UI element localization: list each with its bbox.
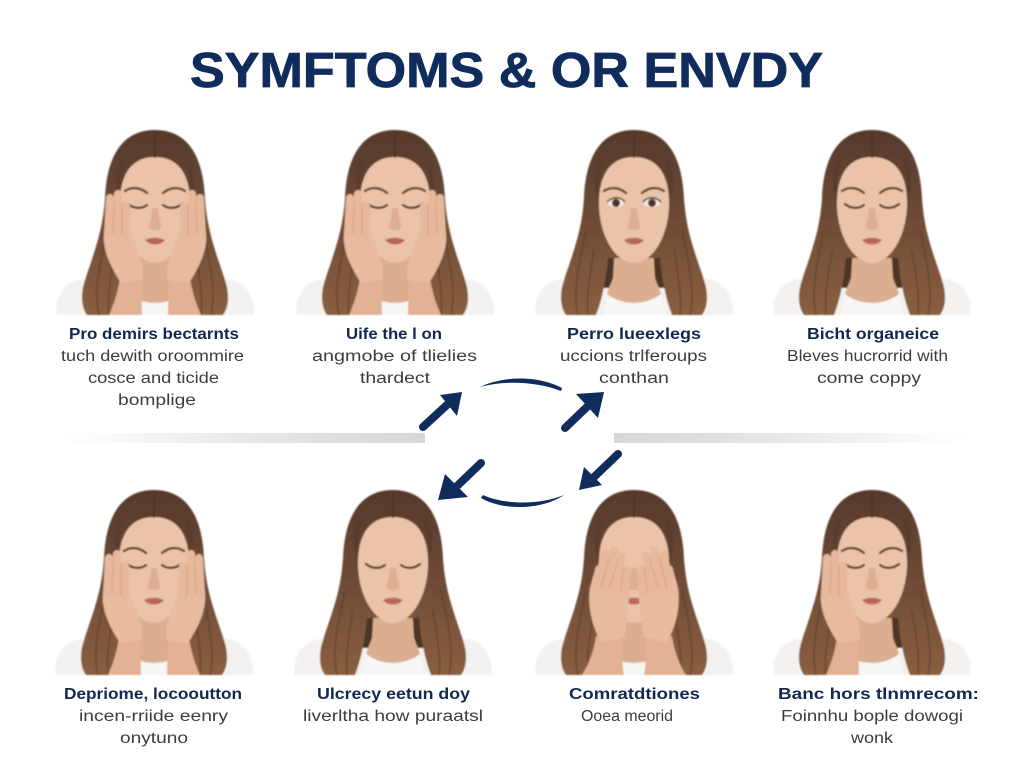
description: symptom 8: wonk (850, 730, 893, 747)
portrait: hands covering eyes (535, 490, 733, 675)
portrait: hands on both cheeks (55, 490, 253, 675)
heading: symptom 1: Pro demirs bectarnts (69, 326, 239, 343)
description: symptom 2: angmobe of tlielies (312, 348, 477, 365)
description: symptom 8: Foinnhu bople dowogi (781, 708, 963, 725)
portrait: one hand on cheek (773, 490, 971, 675)
portrait: eyes closed (294, 490, 492, 675)
arc: bottom (481, 495, 564, 507)
panel: symptom 6 (294, 490, 492, 725)
description: symptom 5 (79, 708, 228, 747)
heading: symptom 3: Perro lueexlegs (567, 326, 701, 343)
description: symptom 5: incen-rriide eenry (79, 708, 228, 725)
panel: symptom 2 (296, 130, 494, 387)
arrow: up right, left (423, 392, 462, 427)
cycle arrows (423, 378, 618, 507)
description: symptom 4: Bleves hucrorrid with (787, 348, 948, 365)
arrow: down left, left (438, 463, 481, 500)
arrow: up right, right (565, 392, 604, 428)
arc: top (480, 378, 562, 391)
description: symptom 7: Ooea meorid (581, 708, 673, 725)
right divider (614, 433, 970, 443)
arrow: down left, right (579, 454, 618, 490)
left divider (55, 433, 425, 443)
panel: symptom 4 (773, 130, 971, 387)
portrait: hands on both cheeks (296, 130, 494, 315)
heading: symptom 5: Depriome, locooutton (64, 686, 242, 703)
description: symptom 8 (781, 708, 963, 747)
heading: symptom 7: Comratdtiones (569, 686, 700, 703)
description: symptom 3: uccions trlferoups (560, 348, 707, 365)
description: symptom 6: liverltha how puraatsl (303, 708, 483, 725)
description: symptom 4: come coppy (817, 370, 921, 387)
description: symptom 1: cosce and ticide (88, 370, 219, 387)
heading: symptom 4: Bicht organeice (807, 326, 939, 343)
description: symptom 5: onytuno (120, 730, 188, 747)
panel: symptom 7 (535, 490, 733, 725)
heading: symptom 8: Banc hors tlnmrecom: (778, 686, 979, 703)
description: symptom 1: bomplige (118, 392, 196, 409)
description: symptom 2 (312, 348, 477, 387)
description: symptom 2: thardect (360, 370, 431, 387)
heading: symptom 2: Uife the l on (346, 326, 442, 343)
panel: symptom 3 (535, 130, 733, 387)
description: symptom 3: conthan (599, 370, 669, 387)
description: symptom 4 (787, 348, 948, 387)
portrait: eyes open, worried (535, 130, 733, 315)
title: SYMFTOMS & OR ENVDY (190, 44, 823, 98)
description: symptom 1: tuch dewith oroommire (61, 348, 244, 365)
panel: symptom 1 (56, 130, 254, 409)
portrait: hands on both cheeks (56, 130, 254, 315)
description: symptom 1 (61, 348, 244, 409)
panel: symptom 8 (773, 490, 979, 747)
heading: symptom 6: Ulcrecy eetun doy (317, 686, 470, 703)
description: symptom 3 (560, 348, 707, 387)
portrait: eyes downcast (773, 130, 971, 315)
panel: symptom 5 (55, 490, 253, 747)
